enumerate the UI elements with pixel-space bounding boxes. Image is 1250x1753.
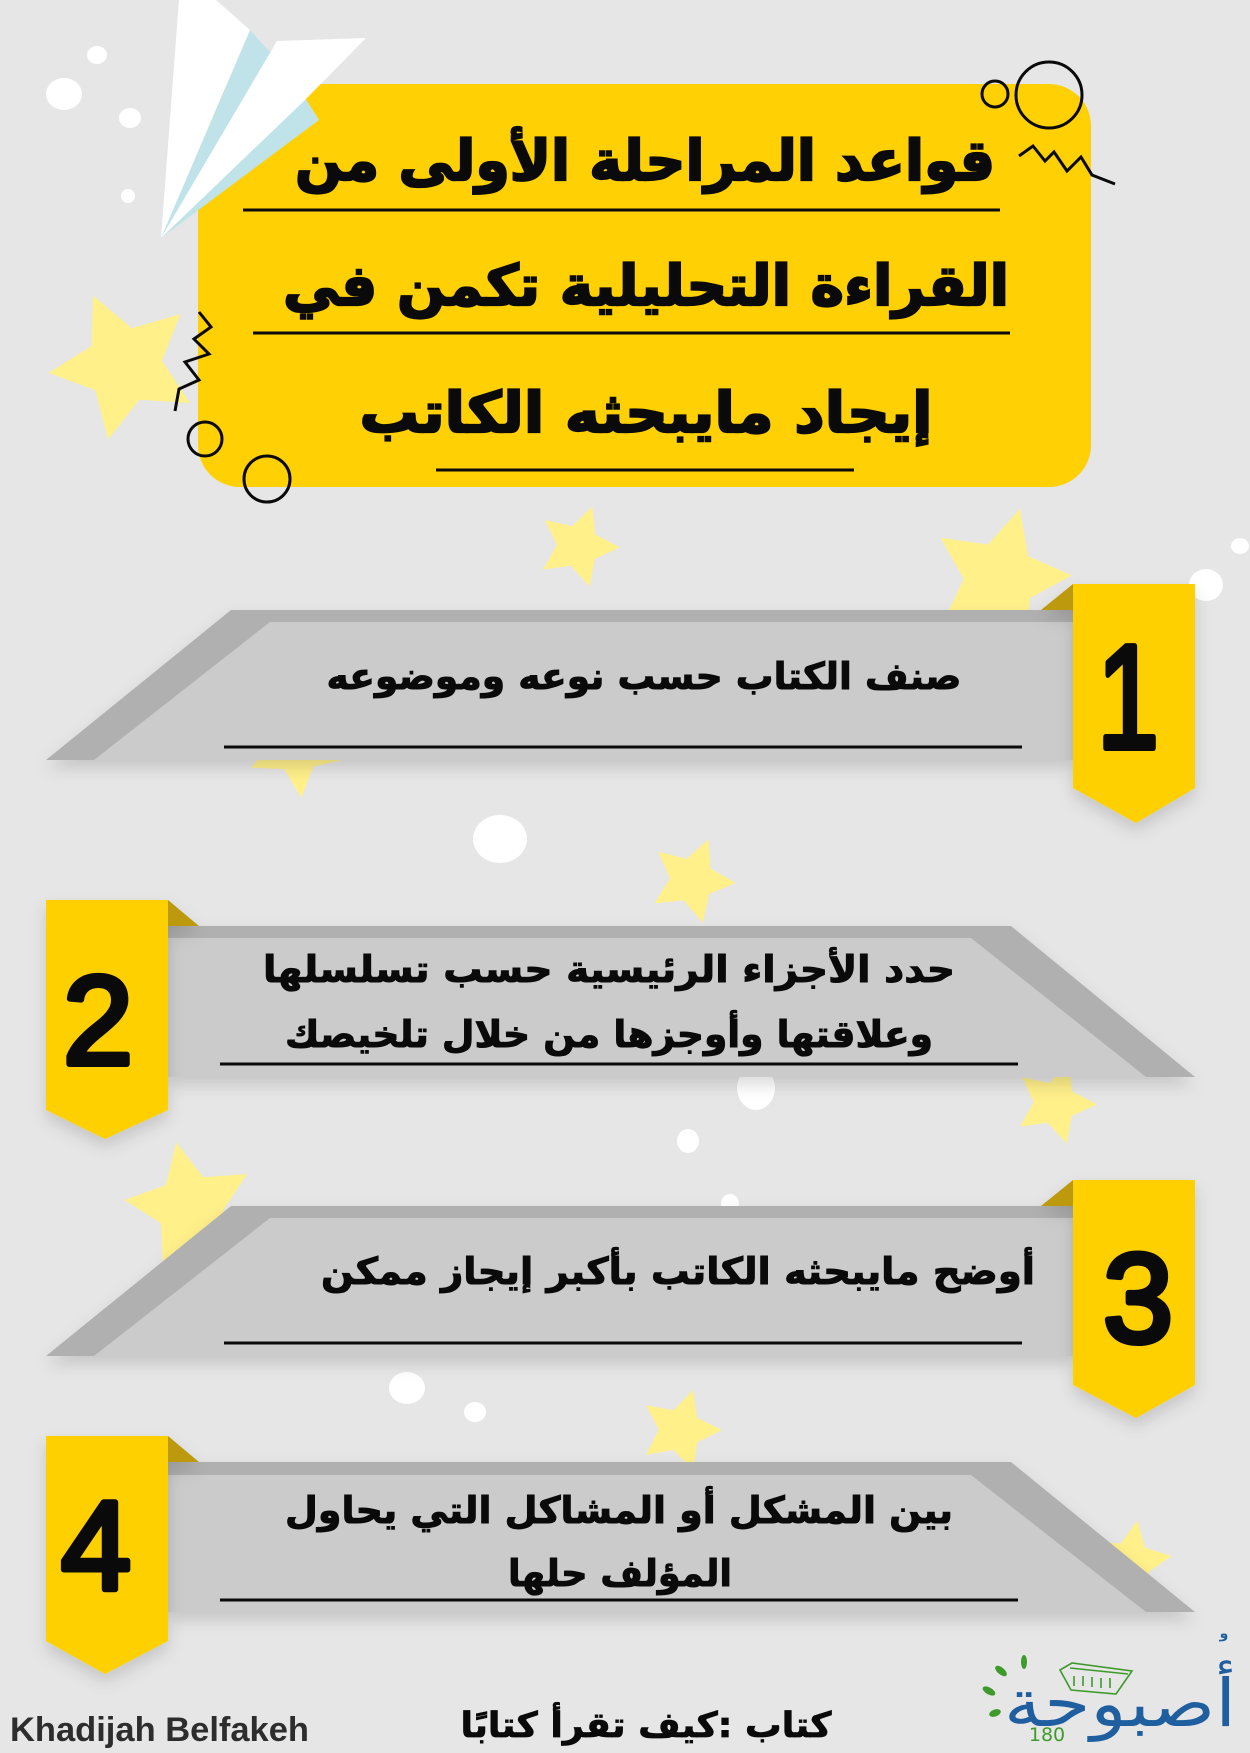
logo wordmark: أصبوحة <box>1004 1660 1236 1742</box>
number 2: 2 <box>63 950 133 1091</box>
title line 3: إيجاد مايبحثه الكاتب <box>360 381 932 446</box>
author name: Khadijah Belfakeh <box>10 1711 309 1749</box>
ribbon <box>46 1206 1074 1356</box>
logo leaves <box>981 1655 1027 1718</box>
step text line 1: بين المشكل أو المشاكل التي يحاول <box>285 1486 953 1532</box>
step text: صنف الكتاب حسب نوعه وموضوعه <box>326 655 962 698</box>
panel: step 2 <box>46 900 1195 1139</box>
icon: paper plane <box>161 0 366 238</box>
panel: title <box>198 84 1091 487</box>
decoration: rings and zigzags <box>175 62 1115 502</box>
number flag <box>46 900 199 1139</box>
panel: step 4 <box>46 1436 1195 1674</box>
panel: step 1 <box>46 584 1195 823</box>
title line 1: قواعد المراحلة الأولى من <box>295 126 995 194</box>
number flag <box>1041 1180 1195 1418</box>
number 1: 1 <box>1097 615 1159 780</box>
title box <box>198 84 1091 487</box>
book source: كتاب :كيف تقرأ كتابًا <box>460 1702 832 1746</box>
number flag <box>46 1436 199 1674</box>
logo building <box>1060 1663 1132 1694</box>
panel: step 3 <box>46 1180 1195 1418</box>
number 3: 3 <box>1103 1228 1173 1369</box>
decorative yellow stars <box>27 266 1177 1602</box>
decorative white dots <box>46 46 1249 1422</box>
step text line 2: المؤلف حلها <box>508 1552 732 1595</box>
step text line 1: حدد الأجزاء الرئيسية حسب تسلسلها <box>263 946 955 991</box>
number flag <box>1041 584 1195 823</box>
step text: أوضح مايبحثه الكاتب بأكبر إيجاز ممكن <box>321 1247 1035 1293</box>
title line 2: القراءة التحليلية تكمن في <box>283 254 1009 319</box>
logo number: 180 <box>1029 1724 1065 1746</box>
ribbon <box>168 1462 1195 1612</box>
logo <box>981 1626 1236 1746</box>
number 4: 4 <box>61 1475 131 1616</box>
ribbon <box>46 610 1074 760</box>
step text line 2: وعلاقتها وأوجزها من خلال تلخيصك <box>285 1010 933 1056</box>
ribbon <box>168 926 1195 1077</box>
logo mark: و <box>1219 1626 1228 1642</box>
